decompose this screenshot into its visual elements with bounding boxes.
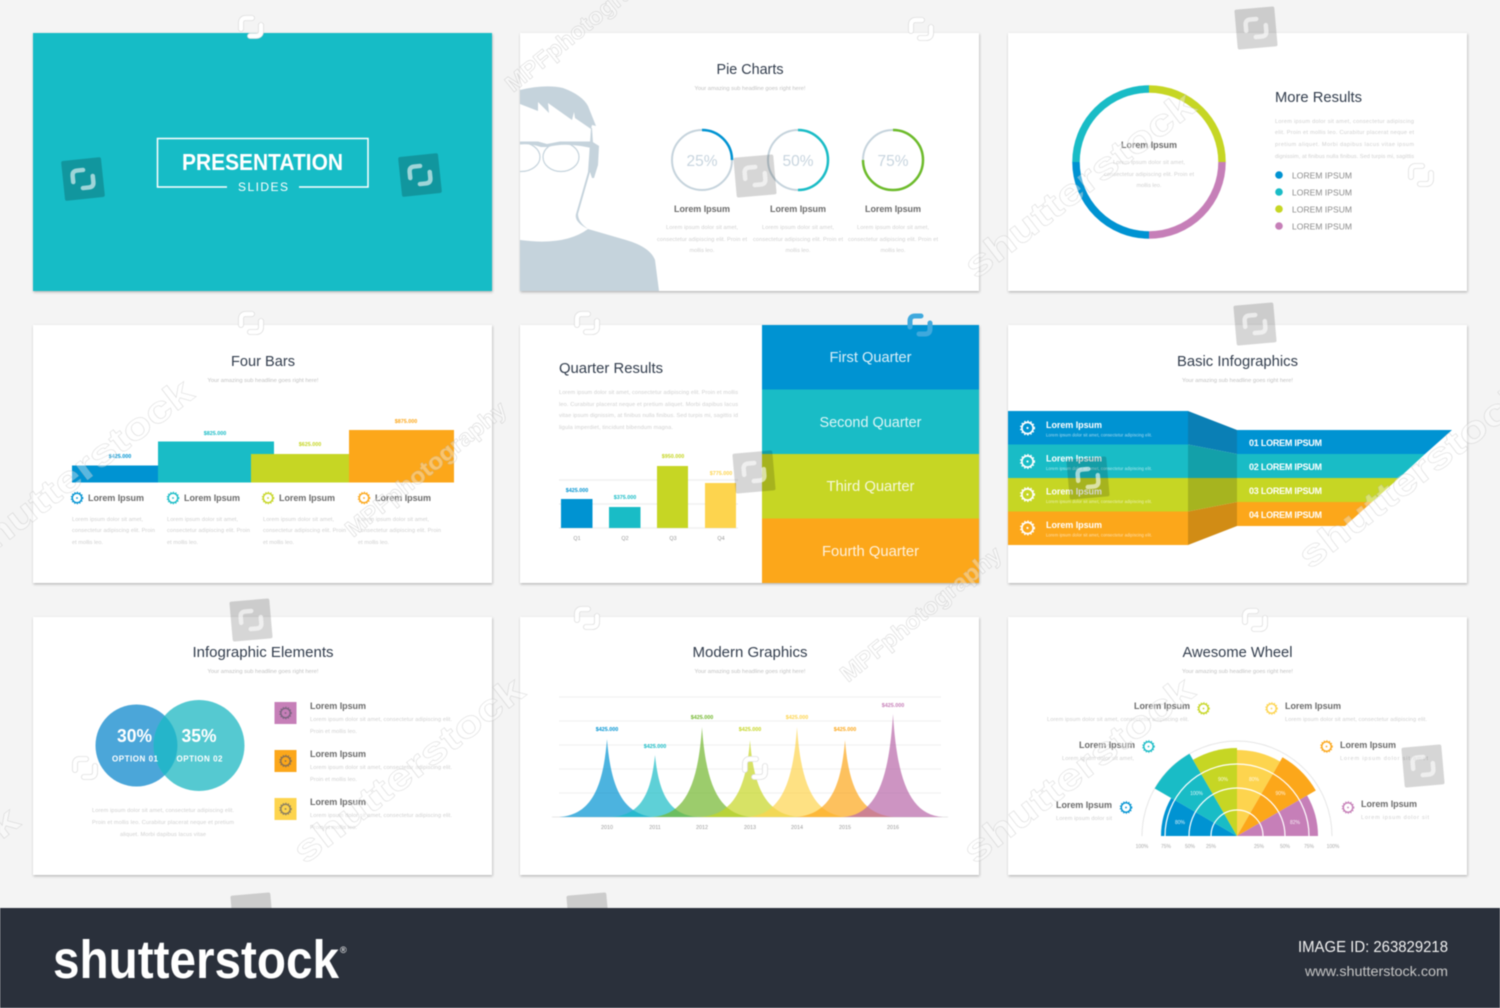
- item: yellow: Lorem ipsum dolor sit amet, consectetur adipiscing elit.: [310, 813, 452, 819]
- venn diagram: OPTION 02: [176, 754, 223, 764]
- body paragraph: leo. Curabitur placerat neque et pretium aliquet. Morbi dapibus lacus: [559, 402, 738, 408]
- wheel chart: 100%: [1136, 844, 1149, 850]
- left row 1: Lorem ipsum dolor sit amet, consectetur adipiscing elit.: [1046, 432, 1152, 438]
- item: pink: Proin et mollis leo.: [310, 729, 357, 735]
- chart: 25 percent ring: 25%: [686, 153, 718, 170]
- cover subtitle: SLIDES: [238, 180, 288, 194]
- caption column 2: [753, 204, 843, 254]
- ring centre text: [1104, 140, 1194, 189]
- peak chart: 2010: [601, 825, 613, 831]
- watermark: stock logo outlines: [75, 18, 1431, 777]
- label: pink: Lorem Ipsum: [1361, 799, 1417, 809]
- peak chart: $425.000: [739, 727, 761, 733]
- legend: LOREM IPSUM: [1292, 170, 1352, 180]
- legend: LOREM IPSUM: [1292, 204, 1352, 214]
- panel: basic infographics: [1008, 325, 1467, 583]
- watermark: shutterstock and photographer text: shutterstock: [1290, 373, 1500, 576]
- venn diagram: OPTION 01: [112, 754, 159, 764]
- bar chart: [559, 454, 738, 542]
- label: teal: Lorem ipsum dolor sit amet,: [1062, 756, 1134, 762]
- right labels: [1249, 438, 1322, 520]
- quarter band: first: First Quarter: [830, 350, 912, 366]
- column 4: consectetur adipiscing elit. Proin: [358, 528, 441, 534]
- caption column 1: [657, 204, 747, 254]
- column 3: [262, 492, 346, 546]
- label: teal: [1062, 740, 1154, 762]
- body paragraph: [1275, 119, 1414, 160]
- label: lime: [1047, 701, 1209, 723]
- peak chart: 2012: [696, 825, 708, 831]
- venn diagram: 30%: [117, 726, 152, 746]
- quarter band: second: Second Quarter: [820, 415, 922, 431]
- bar chart: $625.000: [299, 442, 321, 448]
- column 4: [358, 492, 441, 546]
- peak chart: 2015: [839, 825, 851, 831]
- venn diagram: 35%: [182, 726, 216, 746]
- chart: four segment ring: [1076, 89, 1222, 235]
- registered mark: ®: [340, 945, 347, 955]
- body paragraph: ligula imperdiet, tincidunt bibendum magna.: [559, 425, 673, 431]
- item: pink: [274, 701, 452, 735]
- body paragraph: pretium aliquet. Morbi dapibus lacus vitae ipsum: [1275, 142, 1414, 148]
- panel: pie charts: [502, 33, 979, 291]
- caption column 3: Lorem ipsum dolor sit amet,: [857, 225, 929, 231]
- left row 3: [1021, 486, 1152, 504]
- ring centre text: mollis leo.: [1136, 183, 1162, 189]
- chart: 50 percent ring: 50%: [782, 153, 814, 170]
- wheel chart: 80%: [1249, 777, 1260, 783]
- panel: presentation slides cover: [33, 33, 492, 291]
- item: orange: Lorem Ipsum: [310, 749, 366, 759]
- label: orange: Lorem ipsum dolor sit amet: [1340, 756, 1428, 762]
- column 3: consectetur adipiscing elit. Proin: [263, 528, 346, 534]
- watermark: shutterstock and photographer text: shutterstock: [956, 83, 1203, 286]
- panel: four bars: [33, 325, 492, 583]
- chart: 75 percent ring: [863, 130, 923, 190]
- body paragraph: dignissim, at finibus nulla finibus. Sed turpis mi, sagittis: [1275, 154, 1414, 160]
- panel title: Quarter Results: [559, 360, 663, 377]
- left row 2: [1021, 454, 1152, 471]
- footer bar: [0, 908, 1500, 1008]
- caption column 3: mollis leo.: [880, 248, 906, 254]
- panel: quarter results: [520, 325, 979, 583]
- column 4: Lorem Ipsum: [375, 493, 431, 503]
- bar chart: Q3: [669, 536, 677, 542]
- cover title frame: [158, 138, 368, 187]
- peak chart: $425.000: [596, 727, 618, 733]
- right labels: 02 LOREM IPSUM: [1249, 462, 1322, 472]
- quarter band: fourth: [762, 518, 979, 583]
- item: yellow: [274, 797, 452, 831]
- left row 2: Lorem ipsum dolor sit amet, consectetur adipiscing elit.: [1046, 466, 1152, 471]
- bar chart: $375.000: [614, 495, 636, 501]
- left row 1: Lorem Ipsum: [1046, 420, 1102, 430]
- item: orange: Proin et mollis leo.: [310, 777, 357, 783]
- bar chart: $425.000: [566, 488, 588, 494]
- wheel chart: 90%: [1275, 791, 1286, 797]
- caption column 2: Lorem Ipsum: [770, 204, 826, 214]
- label: blue: [1056, 800, 1132, 822]
- sub headline: Your amazing sub headline goes right here!: [1182, 378, 1293, 384]
- label: orange: [1321, 740, 1428, 762]
- column 1: [71, 492, 155, 546]
- panel: more results: [1008, 33, 1467, 291]
- caption column 1: Lorem ipsum dolor sit amet,: [666, 225, 738, 231]
- sub headline: Your amazing sub headline goes right here!: [694, 669, 806, 675]
- peak chart: [552, 697, 948, 831]
- item: yellow: Proin et mollis leo.: [310, 825, 357, 831]
- label: yellow: Lorem Ipsum: [1285, 701, 1341, 711]
- wheel chart: 80%: [1175, 820, 1186, 826]
- wheel chart: 25%: [1206, 844, 1217, 850]
- wheel chart: 100%: [1190, 791, 1203, 797]
- panel: awesome wheel: [1008, 617, 1467, 875]
- chart: 50 percent ring: [768, 130, 828, 190]
- folded ribbon graphic: [1008, 411, 1452, 545]
- legend: LOREM IPSUM: [1292, 222, 1352, 232]
- body paragraph: Lorem ipsum dolor sit amet, consectetur adipiscing elit. Proin et mollis: [559, 390, 738, 396]
- caption column 1: mollis leo.: [690, 248, 715, 254]
- label: yellow: Lorem ipsum dolor sit amet, consectetur adipiscing elit.: [1285, 717, 1427, 723]
- bar chart: $425.000: [109, 454, 131, 460]
- label: yellow: [1266, 701, 1427, 723]
- caption column 3: [848, 204, 938, 254]
- column 2: consectetur adipiscing elit. Proin: [167, 528, 250, 534]
- wheel chart: 25%: [1254, 844, 1265, 850]
- left row 2: Lorem Ipsum: [1046, 454, 1102, 464]
- panel: infographic elements: [33, 617, 492, 875]
- wheel chart: 75%: [1161, 844, 1172, 850]
- watermark: shutterstock and photographer text: shutterstock: [955, 668, 1202, 871]
- label: lime: Lorem ipsum dolor sit amet, consectetur adipiscing elit.: [1047, 717, 1189, 723]
- quarter band: second: [762, 390, 979, 454]
- legend: LOREM IPSUM: [1292, 188, 1352, 198]
- peak chart: 2013: [744, 825, 756, 831]
- wheel chart: 50%: [1280, 844, 1291, 850]
- site url: www.shutterstock.com: [1304, 963, 1448, 979]
- panel title: Pie Charts: [716, 61, 784, 78]
- peak chart: $425.000: [644, 744, 666, 750]
- peak chart: $425.000: [882, 703, 904, 709]
- left row 3: Lorem ipsum dolor sit amet, consectetur adipiscing elit.: [1046, 499, 1152, 504]
- peak chart: $425.000: [786, 715, 808, 721]
- right labels: 01 LOREM IPSUM: [1249, 438, 1322, 448]
- quarter band: third: [762, 454, 979, 518]
- ring centre text: Lorem ipsum dolor sit amet,: [1113, 160, 1185, 166]
- caption column 2: consectetur adipiscing elit. Proin et: [753, 237, 843, 243]
- venn diagram: [96, 700, 244, 791]
- image id: IMAGE ID: 263829218: [1298, 939, 1448, 956]
- wheel chart: 75%: [1304, 844, 1315, 850]
- right labels: 04 LOREM IPSUM: [1249, 510, 1322, 520]
- wheel chart: 50%: [1185, 844, 1196, 850]
- bar chart: Q2: [621, 536, 629, 542]
- left row 4: [1021, 520, 1152, 538]
- watermark: shutterstock and photographer text: shutterstock: [285, 668, 532, 871]
- quarter band: first: [762, 325, 979, 390]
- left row 4: Lorem Ipsum: [1046, 520, 1102, 530]
- body paragraph: elit. Proin et mollis leo. Curabitur placerat neque et: [1275, 130, 1414, 136]
- column 3: et mollis leo.: [263, 540, 294, 546]
- peak chart: 2014: [791, 825, 803, 831]
- caption column 2: mollis leo.: [786, 248, 811, 254]
- venn caption: aliquet. Morbi dapibus lacus vitae: [120, 832, 206, 838]
- watermark: shutterstock and photographer text: MPFphotography: [835, 541, 1007, 687]
- label: pink: Lorem ipsum dolor sit: [1361, 815, 1429, 821]
- bar chart: $875.000: [395, 419, 417, 425]
- wheel chart: 100%: [1327, 844, 1340, 850]
- peak chart: $425.000: [834, 727, 856, 733]
- illustration: man with glasses: [520, 86, 660, 292]
- item: orange: Lorem ipsum dolor sit amet, consectetur adipiscing elit.: [310, 765, 452, 771]
- column 2: Lorem Ipsum: [184, 493, 240, 503]
- cover title: PRESENTATION: [182, 149, 343, 175]
- column 1: et mollis leo.: [72, 540, 103, 546]
- column 2: et mollis leo.: [167, 540, 198, 546]
- panel title: Basic Infographics: [1177, 353, 1298, 370]
- caption column 2: Lorem ipsum dolor sit amet,: [762, 225, 834, 231]
- left row 1: [1021, 420, 1152, 438]
- legend: [1275, 170, 1352, 232]
- right labels: 03 LOREM IPSUM: [1249, 486, 1322, 496]
- bar chart: $825.000: [204, 431, 226, 437]
- panel title: Infographic Elements: [192, 644, 334, 661]
- panel title: Awesome Wheel: [1182, 644, 1292, 661]
- wheel chart: [1136, 741, 1340, 850]
- column 4: Lorem ipsum dolor sit amet,: [358, 517, 429, 523]
- item: pink: Lorem ipsum dolor sit amet, consectetur adipiscing elit.: [310, 717, 452, 723]
- bar chart: Q1: [573, 536, 581, 542]
- chart: 25 percent ring: [672, 130, 732, 190]
- caption column 1: Lorem Ipsum: [674, 204, 730, 214]
- left row 3: Lorem Ipsum: [1046, 486, 1102, 496]
- wheel chart: 82%: [1290, 820, 1301, 826]
- bar chart: $950.000: [662, 454, 684, 460]
- sub headline: Your amazing sub headline goes right here!: [208, 378, 319, 384]
- body paragraph: [559, 390, 738, 431]
- chart: 75 percent ring: 75%: [878, 153, 908, 170]
- left row 4: Lorem ipsum dolor sit amet, consectetur adipiscing elit.: [1046, 532, 1152, 538]
- peak chart: $425.000: [691, 715, 713, 721]
- panel title: Modern Graphics: [692, 644, 808, 661]
- label: teal: Lorem Ipsum: [1079, 740, 1135, 750]
- panel title: Four Bars: [231, 353, 295, 370]
- column 1: consectetur adipiscing elit. Proin: [72, 528, 155, 534]
- column 1: Lorem Ipsum: [88, 493, 144, 503]
- column 4: et mollis leo.: [358, 540, 389, 546]
- wheel chart: 90%: [1218, 777, 1229, 783]
- venn caption: Lorem ipsum dolor sit amet, consectetur adipiscing elit.: [92, 808, 234, 814]
- watermark: shutterstock and photographer text: MPFphotography: [340, 396, 512, 542]
- ring centre text: consectetur adipiscing elit. Proin et: [1104, 172, 1194, 178]
- bar chart: $775.000: [710, 471, 732, 477]
- label: orange: Lorem Ipsum: [1340, 740, 1396, 750]
- body paragraph: vitae ipsum dignissim, at finibus nulla finibus. Sed turpis mi, sagittis id: [559, 413, 738, 419]
- caption column 1: consectetur adipiscing elit. Proin et: [657, 237, 747, 243]
- item: orange: [274, 749, 452, 783]
- panel title: More Results: [1275, 89, 1362, 106]
- peak chart: 2011: [649, 825, 661, 831]
- bar chart: [72, 419, 454, 482]
- label: blue: Lorem Ipsum: [1056, 800, 1112, 810]
- ring centre text: Lorem Ipsum: [1121, 140, 1177, 150]
- column 3: Lorem ipsum dolor sit amet,: [263, 517, 334, 523]
- panel: modern graphics: [520, 617, 979, 875]
- footer logo: shutterstock: [53, 930, 340, 990]
- label: pink: [1342, 799, 1429, 821]
- sub headline: Your amazing sub headline goes right here!: [694, 86, 806, 92]
- column 2: Lorem ipsum dolor sit amet,: [167, 517, 238, 523]
- body paragraph: Lorem ipsum dolor sit amet, consectetur adipiscing: [1275, 119, 1414, 125]
- label: blue: Lorem ipsum dolor sit: [1056, 816, 1112, 822]
- quarter band: fourth: Fourth Quarter: [822, 544, 919, 560]
- label: lime: Lorem Ipsum: [1134, 701, 1190, 711]
- column 2: [167, 492, 250, 546]
- peak chart: 2016: [887, 825, 899, 831]
- column 3: Lorem Ipsum: [279, 493, 335, 503]
- quarter band: third: Third Quarter: [826, 479, 915, 495]
- caption column 3: Lorem Ipsum: [865, 204, 921, 214]
- bar chart: Q4: [717, 536, 725, 542]
- sub headline: Your amazing sub headline goes right here!: [208, 669, 319, 675]
- venn caption: Proin et mollis leo. Curabitur placerat neque et pretium: [92, 820, 234, 826]
- sub headline: Your amazing sub headline goes right here!: [1182, 669, 1293, 675]
- caption column 3: consectetur adipiscing elit. Proin et: [848, 237, 938, 243]
- item: pink: Lorem Ipsum: [310, 701, 366, 711]
- column 1: Lorem ipsum dolor sit amet,: [72, 517, 143, 523]
- item: yellow: Lorem Ipsum: [310, 797, 366, 807]
- venn caption: [92, 808, 234, 838]
